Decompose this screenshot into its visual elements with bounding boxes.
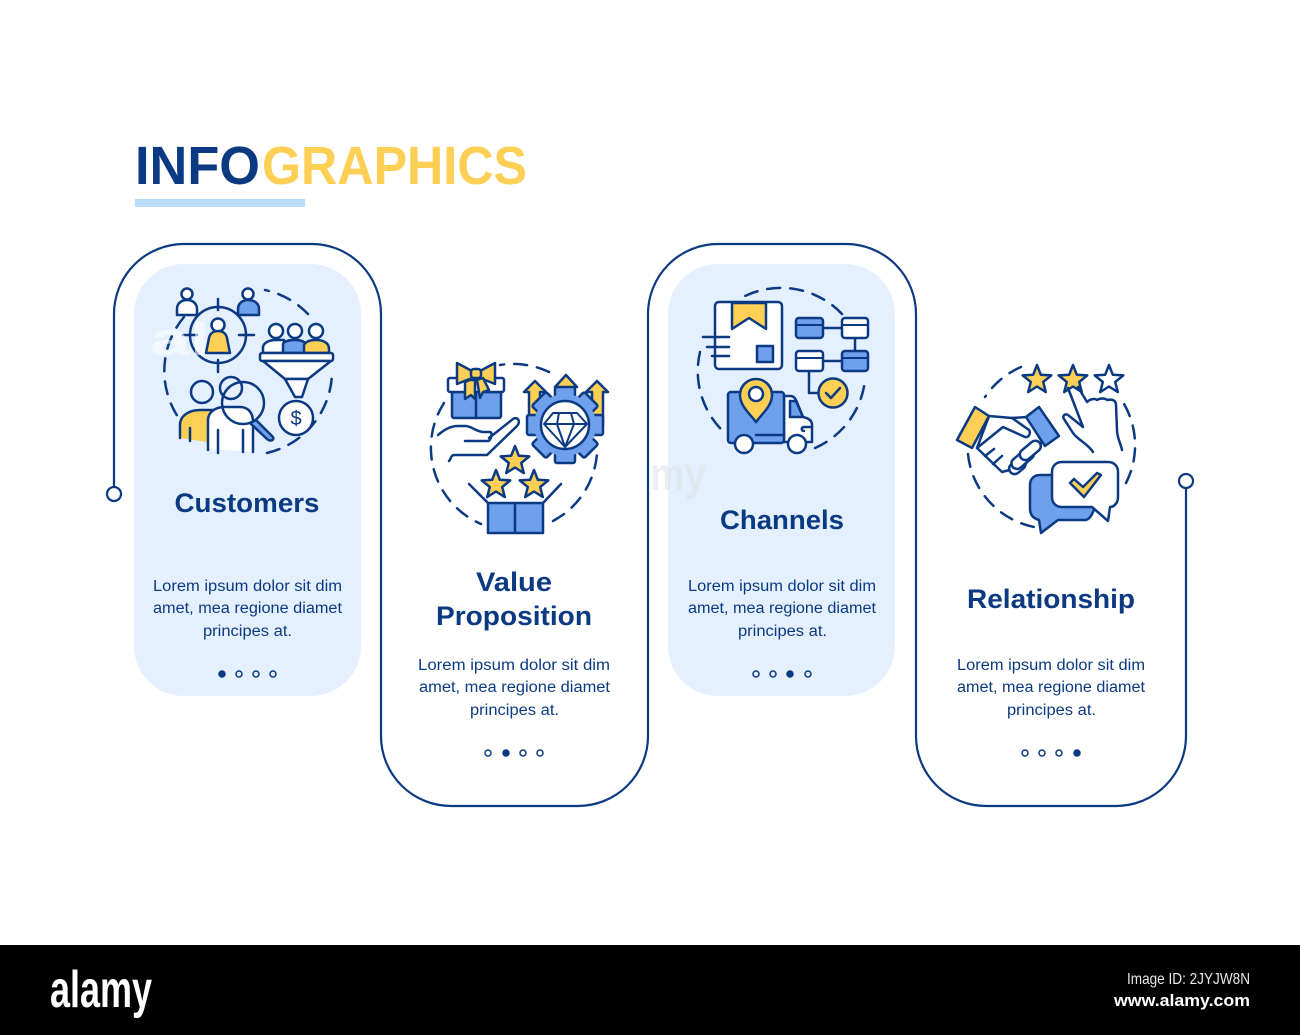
pagination dots: customers bbox=[219, 671, 276, 677]
connecting outline bbox=[107, 244, 1193, 806]
text block: relationship: amet, mea regione diamet bbox=[957, 679, 1146, 696]
heading: customers: Customers bbox=[174, 488, 320, 518]
icon: customers: $ bbox=[290, 408, 302, 430]
text block: channels bbox=[688, 578, 877, 640]
title: INFO bbox=[135, 136, 260, 196]
title underline bbox=[135, 199, 305, 207]
text block: value proposition: Lorem ipsum dolor sit dim bbox=[418, 657, 610, 674]
panel: channels background bbox=[668, 264, 895, 696]
footer logo: alamy bbox=[50, 961, 152, 1019]
icon: relationship bbox=[957, 365, 1135, 533]
text block: customers: amet, mea regione diamet bbox=[153, 600, 343, 617]
icon: value proposition bbox=[431, 363, 608, 533]
text block: relationship bbox=[957, 657, 1146, 719]
title: GRAPHICS bbox=[262, 136, 527, 196]
footer image id: Image ID: 2JYJW8N bbox=[1127, 971, 1250, 988]
text block: value proposition: principes at. bbox=[470, 702, 559, 719]
heading: value proposition: Proposition bbox=[436, 601, 592, 631]
footer url: www.alamy.com bbox=[1113, 991, 1250, 1010]
heading: channels: Channels bbox=[720, 505, 844, 535]
text block: channels: amet, mea regione diamet bbox=[688, 600, 877, 617]
heading: relationship: Relationship bbox=[967, 584, 1135, 614]
icon: customers bbox=[164, 288, 333, 453]
icon: channels bbox=[698, 288, 868, 453]
watermark: faint alamy fragments bbox=[150, 313, 706, 500]
text block: channels: Lorem ipsum dolor sit dim bbox=[688, 578, 876, 595]
text block: relationship: Lorem ipsum dolor sit dim bbox=[957, 657, 1145, 674]
watermark: faint alamy fragments: my bbox=[650, 448, 706, 500]
panel: customers background bbox=[134, 264, 361, 696]
pagination dots: value proposition bbox=[485, 750, 543, 756]
pagination dots: relationship bbox=[1022, 750, 1080, 756]
text block: customers: principes at. bbox=[203, 623, 292, 640]
footer band bbox=[0, 945, 1300, 1035]
title bbox=[135, 136, 527, 196]
text block: value proposition: amet, mea regione diamet bbox=[419, 679, 611, 696]
heading: value proposition bbox=[436, 567, 592, 631]
watermark: faint alamy fragments: al bbox=[150, 313, 210, 365]
text block: customers bbox=[153, 578, 343, 640]
text block: value proposition bbox=[418, 657, 611, 719]
text block: relationship: principes at. bbox=[1007, 702, 1096, 719]
heading: value proposition: Value bbox=[476, 567, 552, 597]
pagination dots: channels bbox=[753, 671, 811, 677]
text block: customers: Lorem ipsum dolor sit dim bbox=[153, 578, 342, 595]
text block: channels: principes at. bbox=[738, 623, 827, 640]
